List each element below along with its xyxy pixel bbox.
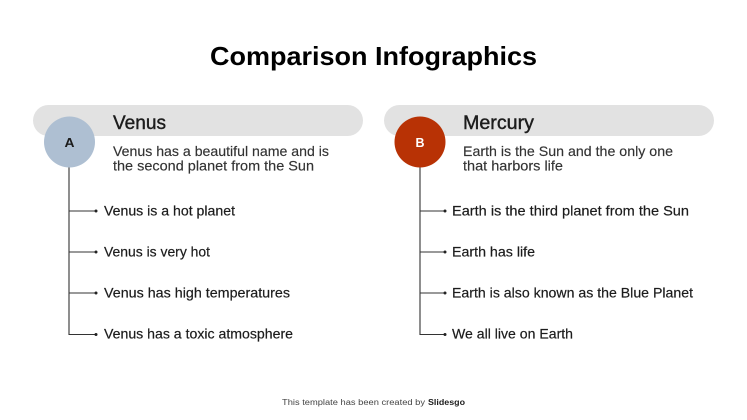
description: Mercury xyxy=(463,143,673,174)
title: Comparison Infographics xyxy=(210,41,537,71)
description: Venus: Venus has a beautiful name and is xyxy=(113,143,329,159)
description: Venus xyxy=(113,143,329,174)
heading: Venus: Venus xyxy=(113,113,166,134)
list: Venus facts xyxy=(104,202,293,342)
footer credit: Slidesgo xyxy=(428,398,465,407)
list: Earth facts xyxy=(452,202,693,342)
footer credit: This template has been created by xyxy=(282,398,425,407)
list: Venus facts: Venus has high temperatures xyxy=(104,284,290,300)
list: Venus facts: Venus has a toxic atmosphere xyxy=(104,326,293,342)
heading: Mercury: Mercury xyxy=(463,113,535,134)
footer credit xyxy=(282,398,465,407)
list: Earth facts: Earth is also known as the Blue Planet xyxy=(452,284,693,300)
header bar: Mercury xyxy=(384,105,714,136)
panel: Mercury xyxy=(384,105,714,342)
list: Earth facts: Earth is the third planet from the Sun xyxy=(452,202,689,218)
list: Venus facts: Venus is very hot xyxy=(104,244,210,260)
connector tree: Mercury xyxy=(420,165,446,336)
badge: B xyxy=(394,116,446,168)
badge: A xyxy=(44,116,95,168)
description: Venus: the second planet from the Sun xyxy=(113,158,314,174)
list: Earth facts: We all live on Earth xyxy=(452,326,573,342)
header bar: Venus xyxy=(33,105,363,136)
badge: B: B xyxy=(416,135,424,150)
list: Earth facts: Earth has life xyxy=(452,244,535,260)
badge: A: A xyxy=(64,135,75,150)
panel: Venus xyxy=(33,105,363,342)
connector tree: Venus xyxy=(69,165,98,336)
list: Venus facts: Venus is a hot planet xyxy=(104,202,235,218)
description: Mercury: Earth is the Sun and the only one xyxy=(463,143,673,159)
description: Mercury: that harbors life xyxy=(463,158,563,174)
